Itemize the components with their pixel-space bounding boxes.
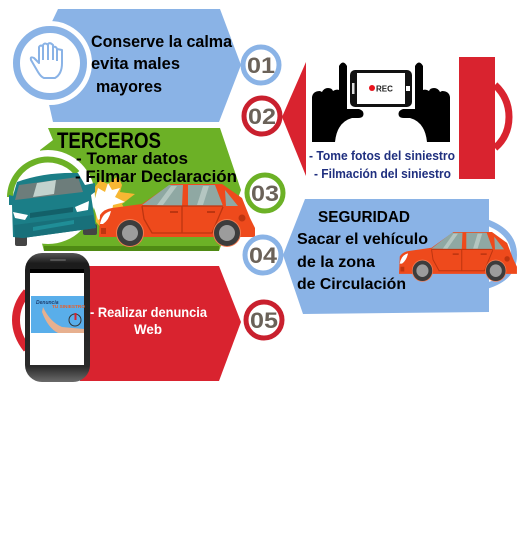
phone screen image xyxy=(31,296,86,333)
white circle behind teal car xyxy=(1,150,95,244)
badge 05: 05 xyxy=(250,308,278,333)
text: realizar denuncia web: - Realizar denuncia xyxy=(90,304,207,320)
panel 03 green arrow xyxy=(40,128,241,251)
text: seguridad: de Circulación xyxy=(297,276,406,293)
text: seguridad: Sacar el vehículo xyxy=(297,231,428,248)
icon: small orange car xyxy=(399,232,517,282)
badge 02 xyxy=(244,98,280,134)
panel 05: denuncia web xyxy=(16,253,241,382)
panel 04: seguridad xyxy=(283,199,517,314)
text: terceros: - Filmar Declaración xyxy=(75,168,237,186)
badge 02: 02 xyxy=(248,104,276,129)
text: realizar denuncia web: Web xyxy=(134,321,162,337)
icon: orange car xyxy=(99,184,255,247)
badge 03: 03 xyxy=(251,181,279,206)
text: conserve la calma: Conserve la calma xyxy=(91,33,233,51)
text: fotos y filmación xyxy=(309,149,455,181)
badge 04: 04 xyxy=(249,243,278,268)
text: conserve la calma xyxy=(91,33,233,96)
icon: smartphone xyxy=(25,253,90,382)
phone screen image: TU SINIESTRO xyxy=(52,304,86,309)
badge 01: 01 xyxy=(247,53,275,78)
text: seguridad xyxy=(297,209,428,293)
text: realizar denuncia web xyxy=(90,304,207,337)
phone screen image: Denuncia xyxy=(36,300,59,306)
explosion burst xyxy=(93,176,135,232)
badge 04 xyxy=(245,237,281,273)
panel 02 red arrow xyxy=(282,62,306,176)
badge 01 xyxy=(243,47,279,83)
panel 04 blue arrow xyxy=(283,199,489,314)
icon: teal car xyxy=(9,173,97,246)
text: fotos y filmación: - Filmación del siniestro xyxy=(314,167,451,181)
green ring behind teal car xyxy=(10,160,77,197)
panel 03: terceros xyxy=(1,128,255,251)
icon: raised hand xyxy=(8,21,92,105)
icon: hands framing phone recording: REC xyxy=(376,84,393,94)
badge 03 xyxy=(247,175,283,211)
text: conserve la calma: mayores xyxy=(96,78,162,96)
text: terceros xyxy=(57,128,237,186)
badge 05 xyxy=(246,302,282,338)
panel 01 background arrow xyxy=(48,9,241,122)
text: conserve la calma: evita males xyxy=(91,55,180,73)
ring right of panel 04 xyxy=(486,222,514,286)
panel 05 red arrow xyxy=(80,266,241,381)
icon: hands framing phone recording xyxy=(312,62,450,142)
panel 02 red bar and ring xyxy=(459,57,509,179)
panel 02: fotos del siniestro xyxy=(282,57,509,181)
text: seguridad: SEGURIDAD xyxy=(318,209,410,226)
text: terceros: - Tomar datos xyxy=(76,150,188,168)
text: terceros: TERCEROS xyxy=(57,128,161,153)
text: fotos y filmación: - Tome fotos del siniestro xyxy=(309,149,455,163)
red ring left of phone xyxy=(16,292,27,349)
panel 01: conserve la calma xyxy=(8,9,241,122)
text: seguridad: de la zona xyxy=(297,254,375,271)
